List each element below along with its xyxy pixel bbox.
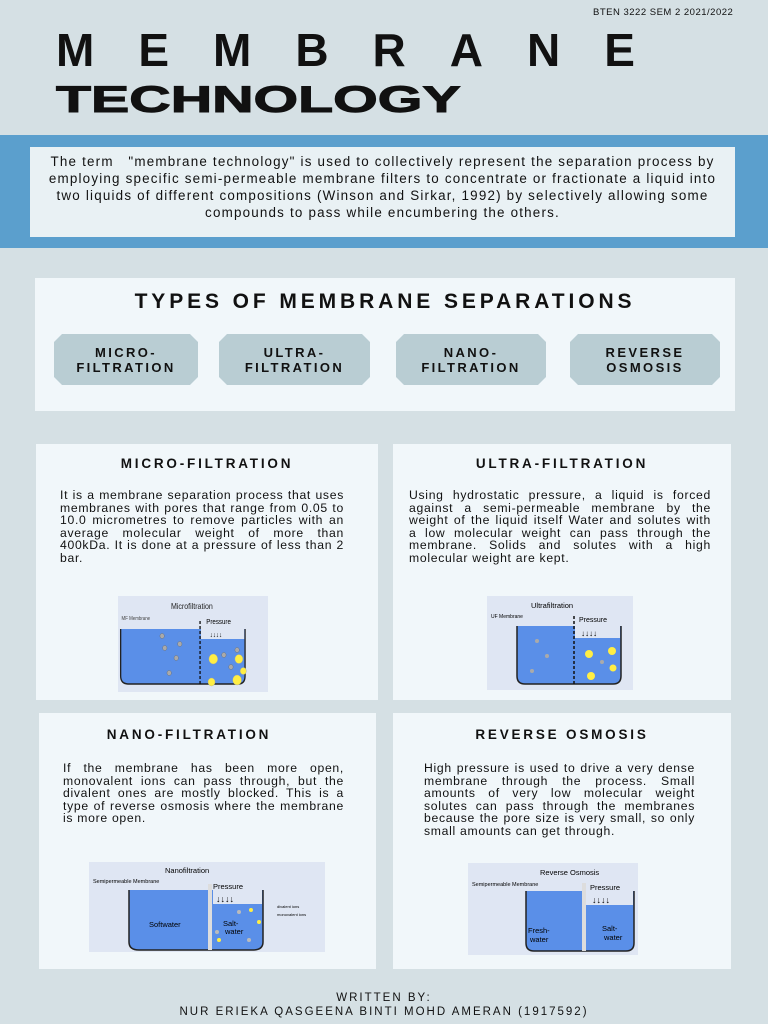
- heading: MICRO-FILTRATION: [121, 456, 293, 471]
- diagram: ↓↓↓↓: [210, 632, 222, 639]
- diagram: Fresh-: [528, 926, 550, 935]
- diagram: Pressure: [579, 617, 607, 624]
- diagram: monovalent ions: [277, 912, 306, 917]
- footer: [179, 992, 589, 1018]
- diagram: Salt-: [602, 924, 618, 933]
- pill: ultra: [219, 334, 370, 385]
- intro text: The term "membrane technology" is used to collectively represent the separation process by employing specific semi-permeable membrane filters to concentrate or fractionate a liquid into two liquids of different compositions (Winson and Sirkar, 1992) by selectively allowing some compounds to pass while encumbering the others.: [49, 154, 716, 220]
- diagram: [118, 596, 268, 692]
- diagram: Pressure: [590, 883, 620, 892]
- panel: micro: [36, 444, 378, 700]
- diagram: ↓↓↓↓: [216, 894, 234, 904]
- text: If the membrane has been more open, monovalent ions can pass through, but the divalent ones are mostly blocked. This is a type of reverse osmosis where the membrane is more open.: [63, 761, 344, 825]
- diagram: Microfiltration: [171, 602, 213, 611]
- course code: BTEN 3222 SEM 2 2021/2022: [593, 7, 733, 18]
- text: It is a membrane separation process that uses membranes with pores that range from 0.05 to 10.0 micrometres to remove particles with an average molecular weight of more than 400kDa. It is done at a pressure of less than 2 bar.: [60, 488, 344, 565]
- diagram: Softwater: [149, 920, 181, 929]
- title: TECHNOLOGY: [56, 79, 461, 120]
- diagram: Salt-: [223, 919, 239, 928]
- intro text: [30, 147, 735, 237]
- diagram: Pressure: [213, 882, 243, 891]
- diagram: water: [224, 927, 244, 936]
- footer: NUR ERIEKA QASGEENA BINTI MOHD AMERAN (1917592): [179, 1006, 589, 1018]
- pill: micro: MICRO-: [95, 344, 157, 360]
- heading: NANO-FILTRATION: [107, 727, 271, 742]
- types heading: TYPES OF MEMBRANE SEPARATIONS: [135, 290, 635, 313]
- footer: WRITTEN BY:: [336, 992, 432, 1004]
- diagram: MF Membrane: [122, 616, 150, 621]
- pill: micro: [54, 334, 198, 385]
- heading: REVERSE OSMOSIS: [475, 727, 649, 742]
- diagram: Nanofiltration: [165, 866, 209, 875]
- text: Using hydrostatic pressure, a liquid is forced against a semi-permeable membrane by the weight of the liquid itself Water and solutes with a low molecular weight can pass through the membrane. Solids and solutes with a high molecular weight are kept.: [409, 488, 711, 565]
- diagram: Semipermeable Membrane: [93, 879, 159, 885]
- text: High pressure is used to drive a very dense membrane through the process. Small amounts of very low molecular weight solutes can pass through the membranes because the pore size is very small, so only small amounts can get through.: [424, 761, 695, 838]
- diagram: [487, 596, 633, 690]
- diagram: divalent ions: [277, 904, 299, 909]
- panel: RO: [393, 713, 731, 969]
- title: [56, 24, 679, 120]
- panel: nano: [39, 713, 376, 969]
- pill: RO: REVERSE: [606, 344, 684, 360]
- diagram: Reverse Osmosis: [540, 868, 599, 877]
- pill: RO: OSMOSIS: [606, 360, 684, 374]
- diagram: ↓↓↓↓: [592, 895, 610, 905]
- diagram: water: [603, 933, 623, 942]
- diagram: Ultrafiltration: [531, 601, 573, 610]
- panel: ultra: [393, 444, 731, 700]
- intro band: [0, 135, 768, 248]
- panel: types: [35, 278, 735, 411]
- diagram: [468, 863, 638, 955]
- pill: ultra: FILTRATION: [245, 360, 344, 374]
- heading: ULTRA-FILTRATION: [476, 456, 648, 471]
- pill: nano: [396, 334, 546, 385]
- diagram: ↓↓↓↓: [581, 629, 597, 638]
- title: MEMBRANE: [56, 24, 679, 76]
- diagram: [89, 862, 325, 952]
- diagram: UF Membrane: [491, 614, 523, 620]
- diagram: Pressure: [206, 619, 231, 626]
- pill: nano: NANO-: [444, 344, 498, 360]
- pill: nano: FILTRATION: [421, 360, 521, 374]
- diagram: Semipermeable Membrane: [472, 882, 538, 888]
- pill: ultra: ULTRA-: [264, 344, 325, 360]
- pill: RO: [570, 334, 720, 385]
- diagram: water: [529, 935, 549, 944]
- pill: micro: FILTRATION: [76, 360, 176, 374]
